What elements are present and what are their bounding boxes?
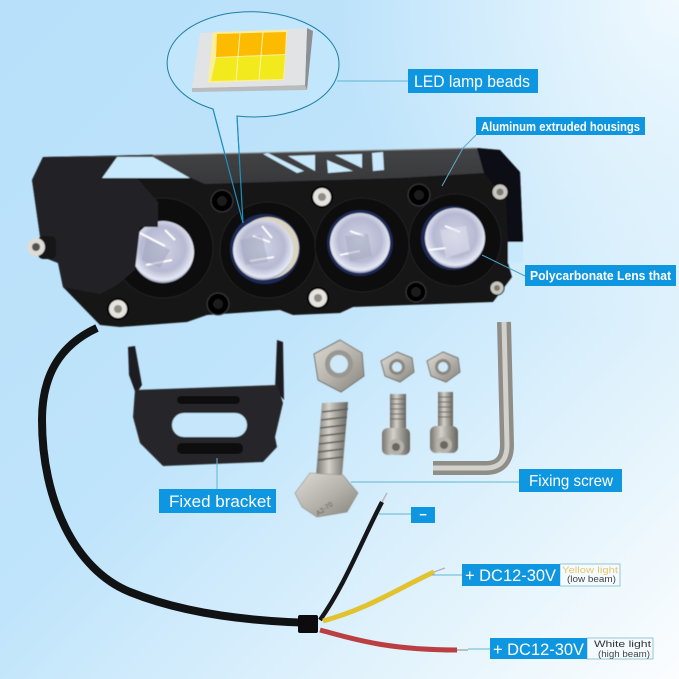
lens sockets	[113, 194, 501, 298]
mounting bracket	[128, 340, 284, 466]
leader line: fixing screw	[351, 481, 519, 483]
label: yellow wire voltage: (low beam)	[567, 574, 616, 585]
callout: LED lamp beads magnifier	[167, 12, 339, 223]
label: polycarbonate lens	[525, 265, 676, 286]
label: yellow wire voltage: + DC12-30V	[465, 567, 556, 585]
label: white wire voltage	[490, 638, 653, 659]
label: fixing screw	[519, 469, 622, 492]
leader line: negative wire	[379, 513, 411, 515]
right end bracket	[477, 148, 523, 242]
lens 4	[421, 206, 485, 270]
leader line: fixed bracket	[216, 458, 218, 489]
large bolt: A2-70	[315, 501, 335, 518]
label: white wire voltage: + DC12-30V	[493, 641, 584, 659]
leader line: polycarbonate lens	[482, 255, 525, 276]
small hex nut left	[381, 352, 414, 382]
housing body	[32, 148, 523, 327]
small socket screw left	[382, 394, 410, 455]
label: fixed bracket: Fixed bracket	[169, 493, 271, 511]
large hex nut	[314, 340, 364, 392]
label: aluminum housings: Aluminum extruded housings	[481, 120, 640, 134]
lens 2	[230, 214, 300, 284]
leader line: aluminum housings	[442, 135, 476, 186]
label: LED lamp beads: LED lamp beads	[414, 73, 530, 91]
large bolt	[295, 402, 358, 518]
lens 1	[132, 221, 194, 283]
label: negative: −	[419, 507, 427, 522]
leader line: yellow wire	[432, 574, 462, 576]
label: negative	[411, 507, 435, 523]
left end block	[32, 157, 158, 294]
label: fixing screw: Fixing screw	[529, 473, 613, 490]
leader line: red wire	[468, 648, 490, 650]
plate highlight	[153, 148, 477, 155]
icon: LED chip	[192, 28, 313, 92]
lens 3	[327, 210, 393, 276]
hex key	[433, 322, 507, 468]
leader lines: LED to lens	[213, 109, 243, 223]
wire: black negative	[320, 493, 387, 620]
side bolt	[27, 236, 56, 259]
label: polycarbonate lens: Polycarbonate Lens that	[530, 269, 672, 283]
wire: yellow	[323, 568, 445, 621]
lamp housing	[27, 148, 523, 327]
screws	[108, 184, 508, 319]
small hex nut right	[427, 352, 460, 382]
leader line: LED lamp beads	[337, 80, 408, 82]
label: white wire voltage: White light	[594, 639, 651, 650]
cable	[42, 328, 318, 623]
top plate	[32, 148, 484, 184]
label: fixed bracket	[159, 489, 276, 513]
wire: red	[320, 630, 468, 650]
plate cut-outs	[102, 152, 523, 263]
cable sleeve	[298, 615, 318, 633]
label: yellow wire voltage	[462, 564, 620, 586]
small socket screw right	[430, 392, 458, 453]
label: yellow wire voltage: Yellow light	[562, 565, 618, 576]
label: white wire voltage: (high beam)	[598, 649, 650, 659]
